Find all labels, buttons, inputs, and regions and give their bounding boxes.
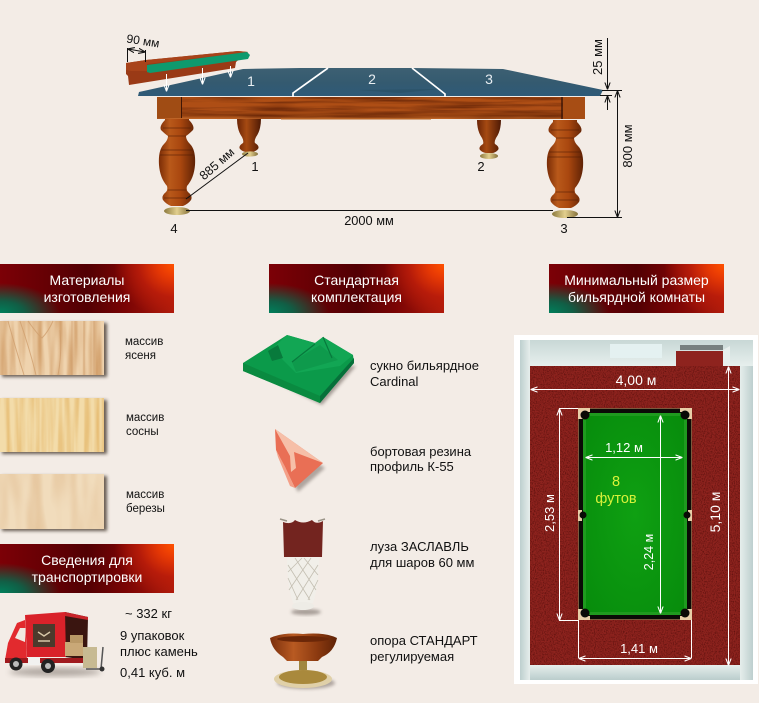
icon: cushion rubber (275, 429, 325, 492)
dimension 2,53 m (542, 408, 578, 620)
slate number 1: 1 (247, 73, 255, 89)
heading: materials: Материалы (50, 272, 124, 288)
slate top with cloth (138, 68, 603, 97)
icon: adjustable foot (270, 634, 337, 689)
dimension 90 mm (126, 31, 160, 62)
label: cushion rubber: профиль К-55 (370, 459, 454, 474)
leg number 2: 2 (477, 159, 485, 174)
label: cloth: Cardinal (370, 374, 419, 389)
heading: standard kit (269, 264, 444, 313)
panel: materials (0, 321, 165, 531)
slate number 2: 2 (368, 71, 376, 87)
heading: materials (0, 264, 174, 313)
heading: transport: Сведения для (41, 552, 133, 568)
dimension 1,41 m (578, 620, 692, 658)
heading: minimum room size: Минимальный размер (564, 272, 709, 288)
slate number 3: 3 (485, 71, 493, 87)
label: pine: сосны (126, 426, 159, 438)
dimension 800 mm: 800 мм (620, 124, 635, 168)
table size label: футов (595, 491, 637, 507)
label: pine: массив (126, 412, 164, 424)
table size label: 8 (612, 474, 620, 490)
leg number 1: 1 (251, 159, 259, 174)
heading: transport (0, 544, 174, 593)
front right leg (547, 120, 583, 218)
slate seams (293, 68, 445, 97)
table rail (157, 97, 585, 120)
label: foot: опора СТАНДАРТ (370, 633, 478, 648)
hand trolley with boxes (83, 647, 104, 672)
leg number 3: 3 (560, 221, 568, 236)
panel: transport (5, 606, 198, 680)
dimension 25 mm (590, 38, 612, 110)
panel: room plan (514, 335, 758, 684)
dimension 5,10 m: 5,10 м (707, 492, 723, 532)
radiator (680, 345, 723, 350)
transport packages: плюс камень (120, 644, 198, 659)
label: pocket: для шаров 60 мм (370, 555, 474, 570)
side cushion rail piece (126, 51, 250, 85)
dimension 800 mm (567, 90, 635, 218)
pockets (578, 408, 692, 620)
label: pocket: луза ЗАСЛАВЛЬ (370, 539, 469, 554)
dimension 90 mm: 90 мм (126, 31, 160, 51)
dimension 1,12 m (586, 440, 682, 458)
heading: materials: изготовления (44, 289, 130, 305)
label: birch: массив (126, 489, 164, 501)
dimension 885 mm: 885 мм (197, 145, 237, 183)
front left leg (159, 118, 195, 215)
label: birch: березы (126, 503, 165, 515)
label: ash: массив (125, 336, 163, 348)
heading: minimum room size (549, 264, 724, 313)
carpet (530, 346, 740, 665)
icon: green cloth (243, 335, 356, 405)
mounting arrows (166, 66, 230, 91)
icon: pocket (280, 519, 325, 615)
transport volume: 0,41 куб. м (120, 665, 185, 680)
room walls (520, 340, 753, 680)
dimension 2,24 m: 2,24 м (642, 534, 656, 570)
wood sample: birch (0, 474, 107, 531)
wood sample: pine (0, 398, 107, 454)
wood sample: ash (0, 321, 107, 377)
heading: minimum room size: бильярдной комнаты (568, 289, 705, 305)
billiard table top view (578, 408, 692, 620)
label: cushion rubber: бортовая резина (370, 444, 471, 459)
dimension 4,00 m: 4,00 м (616, 372, 656, 388)
transport weight: ~ 332 кг (125, 606, 172, 621)
label: ash: ясеня (125, 350, 156, 362)
dimension 2000 mm: 2000 мм (344, 213, 394, 228)
leg number 4: 4 (170, 221, 178, 236)
heading: standard kit: Стандартная (314, 272, 399, 288)
dimension 1,41 m: 1,41 м (620, 641, 658, 656)
room frame (514, 335, 758, 684)
heading: transport: транспортировки (32, 569, 142, 585)
billiard table side view (126, 31, 635, 236)
back left leg (237, 119, 261, 157)
back right leg (477, 120, 501, 159)
label: foot: регулируемая (370, 649, 454, 664)
icon: delivery truck (5, 612, 104, 676)
panel: standard kit (243, 335, 479, 689)
dimension 885 mm (186, 145, 248, 199)
dimension 2,53 m: 2,53 м (542, 494, 557, 532)
label: cloth: сукно бильярдное (370, 358, 479, 373)
dimension 25 mm: 25 мм (590, 39, 605, 75)
heading: standard kit: комплектация (311, 289, 402, 305)
truck wheels (10, 658, 55, 673)
transport packages: 9 упаковок (120, 628, 184, 643)
dimension 1,12 m: 1,12 м (605, 440, 643, 455)
window (610, 344, 662, 358)
